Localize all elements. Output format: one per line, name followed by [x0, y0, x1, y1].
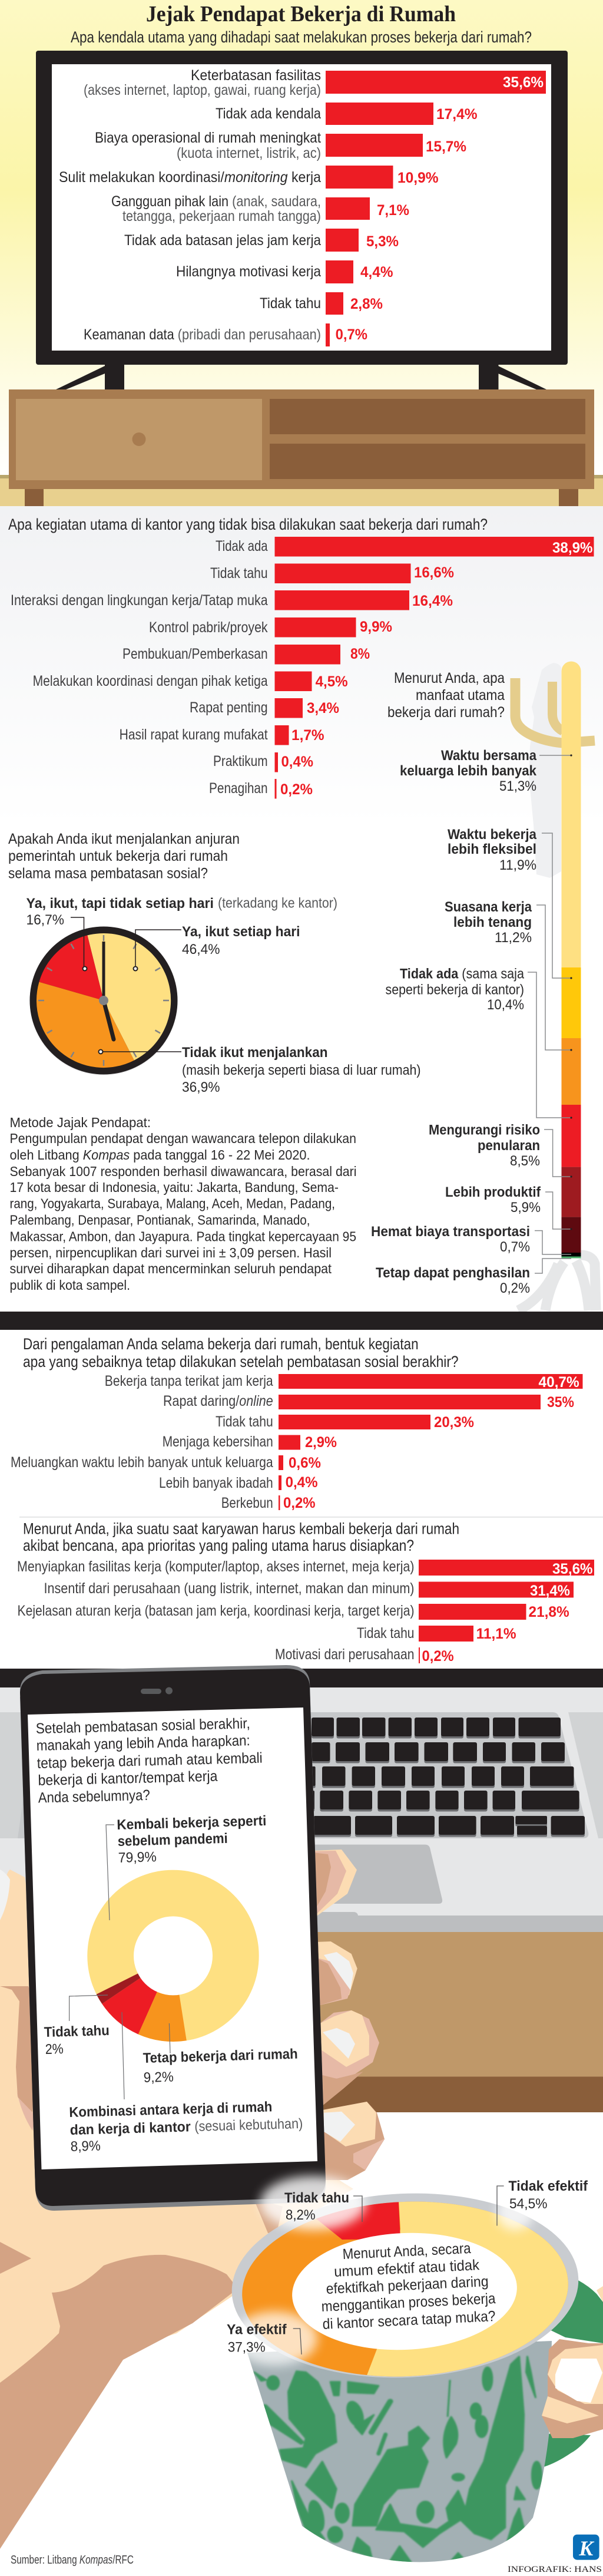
row: gangguan pihak lain	[111, 193, 409, 224]
smartphone	[20, 1665, 326, 2211]
row: 16,6%	[414, 564, 454, 581]
label: tidak ikut menjalankan: Tidak ikut menjalankan	[182, 1045, 327, 1061]
row	[149, 617, 392, 638]
row	[216, 1414, 474, 1431]
row: Menjaga kebersihan	[163, 1434, 273, 1450]
heading: manfaat utama: bekerja dari rumah?	[387, 704, 505, 721]
label: mengurangi risiko	[429, 1122, 540, 1169]
label: tidak efektif: 54,5%	[509, 2196, 548, 2212]
label: mengurangi risiko: penularan	[478, 1138, 540, 1154]
label: tidak ikut menjalankan: (masih bekerja seperti biasa di luar rumah)	[182, 1062, 420, 1078]
heading: manfaat utama	[387, 670, 505, 721]
text block: metode jajak pendapat: Makassar, Ambon, dan Jayapura. Pada tingkat kepercayaan 95	[9, 1229, 356, 1244]
text block: metode jajak pendapat: survei diharapkan dapat mencerminkan seluruh pendapat	[9, 1261, 332, 1276]
row	[221, 1495, 316, 1511]
text block: metode jajak pendapat: Pengumpulan pendapat dengan wawancara telepon dilakukan	[9, 1131, 356, 1146]
label: ikut setiap hari: Ya, ikut setiap hari	[182, 924, 300, 940]
label: waktu lebih fleksibel: lebih fleksibel	[448, 841, 536, 857]
label: tidak ada sama saja	[385, 966, 525, 1013]
row: Rapat penting	[190, 699, 268, 716]
row: Melakukan koordinasi dengan pihak ketiga	[33, 673, 268, 689]
label: tidak ikut menjalankan	[182, 1045, 420, 1095]
label: hemat transportasi	[371, 1224, 530, 1255]
row: 2,9%	[305, 1434, 337, 1451]
label: kombinasi: (sesuai kebutuhan)	[194, 2116, 303, 2135]
label: kombinasi: 8,9%	[70, 2138, 101, 2155]
question on mug	[321, 2240, 496, 2333]
label: tidak setiap hari	[26, 896, 337, 928]
bar chart: kegiatan utama di kantor	[11, 537, 594, 799]
row: 0,2%	[283, 1495, 316, 1511]
label: tidak ikut menjalankan: 36,9%	[182, 1079, 220, 1095]
row: 40,7%	[538, 1374, 579, 1391]
heading: anjuran pemerintah: Apakah Anda ikut menjalankan anjuran	[8, 831, 240, 847]
label: tidak tahu 2%	[44, 2023, 110, 2058]
row: keamanan data: 0,7%	[336, 326, 367, 343]
label: suasana kerja: 11,2%	[495, 930, 532, 946]
row: Tidak tahu	[210, 565, 268, 582]
clock pie chart	[29, 917, 181, 1075]
row: Kejelasan aturan kerja (batasan jam kerja, koordinasi kerja, target kerja)	[18, 1603, 415, 1619]
heading: anjuran pemerintah: selama masa pembatasan sosial?	[8, 866, 208, 882]
row: 0,4%	[281, 754, 313, 770]
row: Menyiapkan fasilitas kerja (komputer/laptop, akses internet, meja kerja)	[17, 1558, 415, 1575]
slice: tidak efektif	[367, 2201, 568, 2377]
heading: question prioritas	[23, 1520, 459, 1554]
text block: metode jajak pendapat: 17 kota besar di Indonesia, yaitu: Jakarta, Bandung, Sema-	[9, 1180, 339, 1195]
label: mengurangi risiko: Mengurangi risiko	[429, 1122, 540, 1138]
slice: tidak tahu	[316, 2202, 400, 2240]
title: Jejak Pendapat Bekerja di Rumah	[146, 2, 456, 27]
row	[163, 1393, 574, 1411]
finger 1	[312, 1850, 357, 1917]
heading: anjuran pemerintah: pemerintah untuk bekerja dari rumah	[8, 848, 228, 864]
text block: metode jajak pendapat: rang, Yogyakarta, Surabaya, Malang, Aceh, Medan, Padang,	[9, 1196, 335, 1211]
row: tidak tahu	[260, 292, 383, 315]
slice: tetap bekerja dari rumah	[138, 1956, 187, 2042]
row: gangguan pihak lain: tetangga, pekerjaan rumah tangga)	[122, 208, 321, 224]
label: ikut setiap hari	[182, 924, 300, 957]
phone question: bekerja di kantor/tempat kerja	[38, 1768, 218, 1789]
label: ikut setiap hari: 46,4%	[182, 942, 220, 957]
row: hilangnya motivasi: Hilangnya motivasi kerja	[176, 263, 321, 280]
leader lines: manfaat	[528, 754, 572, 1273]
source: Sumber: Litbang Kompas/RFC	[11, 2554, 134, 2567]
heading: manfaat utama: manfaat utama	[416, 687, 505, 704]
label: tidak tahu 8,2%: 8,2%	[286, 2207, 316, 2223]
label: tidak ada sama saja: Tidak ada (sama saja	[400, 966, 525, 982]
icon: kompas logo: K	[578, 2537, 595, 2560]
row	[122, 645, 370, 665]
label: tidak ada sama saja: seperti bekerja di kantor)	[385, 982, 524, 998]
row	[11, 590, 453, 610]
row: batasan jam kerja: Tidak ada batasan jelas jam kerja	[124, 232, 321, 249]
question on mug: menggantikan proses bekerja	[321, 2290, 496, 2315]
label: tidak tahu 2%: 2%	[45, 2041, 64, 2058]
row: sulit koordinasi: 10,9%	[397, 170, 439, 186]
row: 1,7%	[291, 727, 324, 744]
row	[357, 1625, 516, 1642]
black divider band	[0, 1312, 603, 1330]
row: Tidak tahu	[216, 1414, 273, 1430]
row: 21,8%	[529, 1604, 569, 1620]
label: lebih produktif: 5,9%	[511, 1200, 541, 1216]
label: ya efektif	[227, 2322, 287, 2356]
label: waktu bersama keluarga: Waktu bersama	[441, 748, 537, 764]
phone question: manakah yang lebih Anda harapkan:	[36, 1732, 250, 1754]
row: biaya operasional: Biaya operasional di rumah meningkat	[95, 130, 321, 146]
row: keterbatasan fasilitas: 35,6%	[503, 74, 544, 91]
label: suasana kerja: Suasana kerja	[445, 899, 532, 915]
question on mug: di kantor secara tatap muka?	[322, 2308, 496, 2333]
row: Motivasi dari perusahaan	[275, 1646, 415, 1663]
row: tidak ada kendala: Tidak ada kendala	[216, 105, 321, 122]
label: kembali bekerja: Kembali bekerja seperti	[117, 1813, 267, 1833]
row: tidak ada kendala: 17,4%	[436, 106, 478, 123]
label: ya efektif: Ya efektif	[227, 2322, 287, 2338]
table	[312, 1932, 603, 2112]
row	[209, 779, 313, 799]
label: waktu lebih fleksibel	[448, 827, 537, 873]
row: 35%	[547, 1394, 574, 1411]
text block: metode jajak pendapat: Palembang, Denpasar, Pontianak, Samarinda, Manado,	[9, 1213, 310, 1228]
row	[190, 698, 339, 718]
mug body	[247, 2339, 603, 2562]
label: ya efektif: 37,3%	[228, 2340, 266, 2356]
row: tidak tahu: Tidak tahu	[260, 295, 321, 312]
credit: INFOGRAFIK: HANS	[508, 2565, 602, 2574]
bar chart: kegiatan tetap dilakukan	[11, 1373, 583, 1511]
label: tidak ada sama saja: 10,4%	[487, 997, 524, 1013]
row: 0,6%	[289, 1455, 321, 1471]
phone question: tetap bekerja dari rumah atau kembali	[37, 1750, 263, 1772]
label: lebih produktif	[445, 1184, 541, 1216]
row: biaya operasional: 15,7%	[426, 138, 466, 155]
slice: tidak ikut	[37, 982, 134, 1068]
bar chart: prioritas	[17, 1558, 594, 1665]
row: batasan jam kerja	[124, 229, 399, 252]
row: sulit koordinasi	[59, 166, 439, 189]
tv cabinet	[9, 389, 594, 506]
background: second section	[0, 506, 603, 825]
text block: metode jajak pendapat: publik di kota sampel.	[9, 1277, 130, 1293]
text block: metode jajak pendapat: Metode Jajak Pendapat:	[9, 1115, 151, 1130]
label: kembali bekerja	[117, 1813, 267, 1866]
phone question: Anda sebelumnya?	[38, 1787, 150, 1806]
row: tidak tahu: 2,8%	[350, 296, 383, 312]
label: tidak efektif: Tidak efektif	[509, 2178, 588, 2194]
label: kembali bekerja: 79,9%	[118, 1849, 157, 1866]
row: Bekerja tanpa terikat jam kerja	[105, 1373, 273, 1389]
row: Tidak ada	[216, 538, 268, 554]
phone question: Setelah pembatasan sosial berakhir,	[35, 1715, 250, 1737]
mug handle	[518, 2280, 603, 2472]
row	[213, 752, 313, 772]
row: Meluangkan waktu lebih banyak untuk keluarga	[11, 1454, 273, 1471]
finger 4	[321, 2102, 385, 2180]
label: tetap dapat penghasilan: 0,2%	[500, 1280, 530, 1296]
slice: kombinasi	[102, 1956, 173, 2035]
heading: question prioritas: akibat bencana, apa prioritas yang paling utama harus disiapkan?	[23, 1537, 414, 1554]
row: hilangnya motivasi	[176, 260, 393, 283]
row: Praktikum	[213, 753, 268, 770]
row: Pembukuan/Pemberkasan	[122, 646, 268, 662]
icon: kompas logo	[573, 2535, 599, 2560]
row: 31,4%	[530, 1583, 570, 1599]
label: waktu bersama keluarga: 51,3%	[499, 778, 536, 794]
row: gangguan pihak lain: 7,1%	[377, 202, 409, 219]
donut chart: harapan setelah pembatasan	[69, 1825, 259, 2099]
row: gangguan pihak lain: Gangguan pihak lain (anak, saudara,	[111, 193, 321, 210]
row: Hasil rapat kurang mufakat	[120, 726, 268, 743]
panel: television with bar chart	[36, 51, 568, 365]
row: Berkebun	[221, 1495, 273, 1511]
slice: ikut setiap hari	[87, 933, 171, 1061]
row	[105, 1373, 583, 1391]
row: keterbatasan fasilitas: Keterbatasan fasilitas	[191, 67, 321, 84]
row: biaya operasional: (kuota internet, listrik, ac)	[177, 145, 321, 161]
label: kembali bekerja: sebelum pandemi	[117, 1831, 228, 1850]
label: waktu bersama keluarga	[400, 748, 537, 794]
row: Penagihan	[209, 780, 268, 797]
label: tetap bekerja dari rumah	[143, 2046, 298, 2086]
hand gripping handle	[542, 2339, 603, 2438]
background: floor	[0, 475, 603, 506]
finger 3	[318, 2010, 379, 2109]
label: kombinasi: Kombinasi antara kerja di rumah	[69, 2099, 273, 2121]
slice: tidak tahu	[97, 1956, 173, 2004]
row: 4,5%	[316, 673, 348, 690]
label: tidak setiap hari: Ya, ikut, tapi tidak setiap hari	[26, 896, 214, 911]
label: tetap bekerja dari rumah: Tetap bekerja dari rumah	[143, 2046, 298, 2066]
phone question	[35, 1715, 263, 1806]
row: Kontrol pabrik/proyek	[149, 619, 268, 636]
label: waktu bersama keluarga: keluarga lebih banyak	[400, 763, 537, 779]
label: kombinasi: dan kerja di kantor	[69, 2119, 191, 2138]
heading: anjuran pemerintah	[8, 831, 240, 882]
heading: question 2: Apa kegiatan utama di kantor yang tidak bisa dilakukan saat bekerja dari rumah?	[8, 516, 488, 533]
row: 20,3%	[434, 1414, 474, 1431]
row	[216, 537, 594, 556]
label: waktu lebih fleksibel: 11,9%	[499, 857, 536, 873]
label: tetap bekerja dari rumah: 9,2%	[143, 2069, 174, 2086]
translucent label highlights	[233, 2176, 534, 2366]
text block: metode jajak pendapat: oleh Litbang Kompas pada tanggal 16 - 22 Mei 2020.	[9, 1147, 310, 1162]
label: mengurangi risiko: 8,5%	[510, 1153, 540, 1169]
label: hemat transportasi: Hemat biaya transportasi	[371, 1224, 530, 1240]
television stand legs	[56, 365, 546, 389]
row: 35,6%	[552, 1561, 592, 1577]
heading: manfaat utama: Menurut Anda, apa	[394, 670, 505, 686]
label: tetap dapat penghasilan	[376, 1265, 530, 1296]
laptop illustration	[0, 1669, 603, 1932]
row: keterbatasan fasilitas: (akses internet, laptop, gawai, ruang kerja)	[84, 82, 321, 98]
row: tidak ada kendala	[216, 103, 478, 125]
heading: question prioritas: Menurut Anda, jika suatu saat karyawan harus kembali bekerja dari rumah	[23, 1520, 459, 1538]
label: tidak tahu 2%: Tidak tahu	[44, 2023, 110, 2040]
cactus illustration with stacked bar	[515, 661, 596, 1310]
leader lines: mug	[293, 2186, 504, 2354]
heading: question kegiatan setelah pembatasan: apa yang sebaiknya tetap dilakukan setelah pembatasan sosial berakhir?	[23, 1353, 459, 1370]
label: tetap dapat penghasilan: Tetap dapat penghasilan	[376, 1265, 530, 1281]
row: keamanan data: Keamanan data (pribadi dan perusahaan)	[84, 326, 321, 343]
row: 0,2%	[280, 781, 313, 798]
row: Insentif dari perusahaan (uang listrik, internet, makan dan minum)	[44, 1580, 415, 1597]
row: 16,4%	[412, 593, 453, 609]
mug rim with pie chart	[232, 2193, 578, 2378]
text block: metode jajak pendapat: Sebanyak 1007 responden berhasil diwawancara, berasal dari	[9, 1164, 357, 1179]
row: 0,2%	[422, 1648, 454, 1665]
row	[210, 563, 454, 583]
row: Tidak tahu	[357, 1625, 415, 1642]
label: tidak tahu 8,2%	[284, 2190, 349, 2223]
row: keterbatasan fasilitas	[84, 67, 546, 98]
heading: question kegiatan setelah pembatasan	[23, 1335, 459, 1370]
row: 38,9%	[552, 540, 592, 556]
fingers	[312, 1850, 385, 2180]
heading: question kegiatan setelah pembatasan: Dari pengalaman Anda selama bekerja dari rumah, bentuk kegiatan	[23, 1335, 419, 1353]
row: hilangnya motivasi: 4,4%	[360, 264, 393, 280]
row: 8%	[350, 646, 370, 662]
question on mug: efektifkah pekerjaan daring	[326, 2273, 489, 2297]
label: kombinasi	[69, 2099, 303, 2155]
row: Rapat daring/online	[163, 1393, 273, 1409]
hand and arm	[0, 1870, 353, 2549]
label: tidak setiap hari: 16,7%	[26, 912, 64, 928]
label: suasana kerja	[445, 899, 532, 946]
label: suasana kerja: lebih tenang	[453, 914, 532, 930]
row: 9,9%	[360, 619, 392, 635]
label: tidak tahu 8,2%: Tidak tahu	[284, 2190, 349, 2206]
row: Interaksi dengan lingkungan kerja/Tatap muka	[11, 592, 268, 609]
row: batasan jam kerja: 5,3%	[366, 233, 399, 250]
row: sulit koordinasi: Sulit melakukan koordinasi/monitoring kerja	[59, 169, 321, 186]
row: keamanan data	[84, 323, 367, 346]
row: 11,1%	[476, 1626, 516, 1642]
row: biaya operasional	[95, 130, 466, 161]
text block: metode jajak pendapat	[9, 1115, 357, 1293]
label: tidak setiap hari: (terkadang ke kantor)	[218, 896, 337, 911]
question on mug: Menurut Anda, secara	[342, 2240, 471, 2263]
background: top room wall	[0, 0, 603, 475]
row: Lebih banyak ibadah	[159, 1475, 273, 1491]
label: lebih produktif: Lebih produktif	[445, 1184, 541, 1200]
row: 3,4%	[307, 700, 339, 716]
text block: metode jajak pendapat: persen, nirpencuplikan dari survei ini ± 3,09 persen. Hasil	[9, 1245, 332, 1260]
label: tidak efektif	[509, 2178, 588, 2212]
finger 2	[315, 1941, 357, 2006]
label: waktu lebih fleksibel: Waktu bekerja	[448, 827, 537, 843]
row: 0,4%	[286, 1474, 318, 1491]
question on mug: umum efektif atau tidak	[334, 2257, 480, 2280]
slice: tidak setiap hari	[39, 935, 104, 1000]
label: hemat transportasi: 0,7%	[500, 1239, 530, 1255]
